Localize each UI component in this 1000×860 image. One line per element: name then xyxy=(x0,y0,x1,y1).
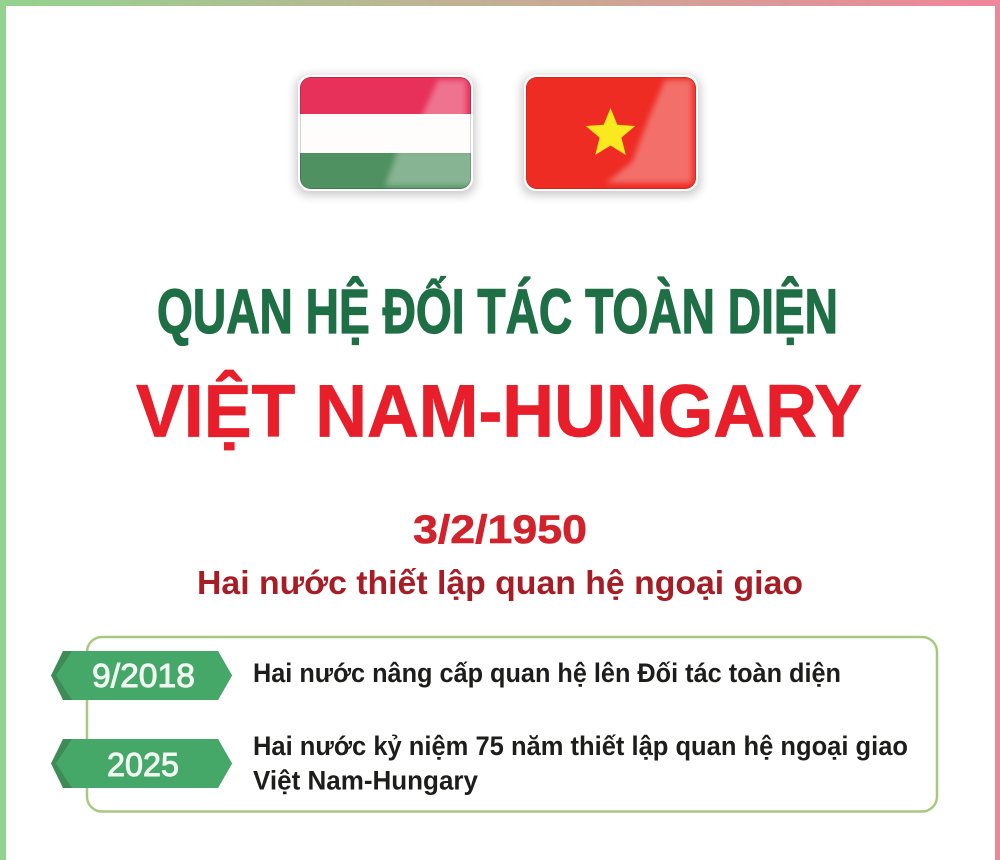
title: line two: VIỆT NAM-HUNGARY xyxy=(136,370,862,452)
icon: yellow star xyxy=(586,108,635,155)
subtitle: Hai nước thiết lập quan hệ ngoại giao xyxy=(197,564,803,601)
event text: 2025: Việt Nam-Hungary xyxy=(253,766,478,796)
icon: Hungary flag xyxy=(296,75,480,195)
panel: timeline xyxy=(51,637,937,812)
badge: 9/2018: 9/2018 xyxy=(92,657,195,694)
badge: 2025: 2025 xyxy=(107,746,179,783)
badge: 2025 xyxy=(51,739,232,788)
icon: Vietnam flag xyxy=(522,75,700,195)
panel outline xyxy=(87,637,937,812)
event text: 2018: Hai nước nâng cấp quan hệ lên Đối tác toàn diện xyxy=(253,658,841,688)
event text: 2025 xyxy=(253,731,908,796)
date heading: 3/2/1950 xyxy=(413,508,587,552)
event text: 2025: Hai nước kỷ niệm 75 năm thiết lập quan hệ ngoại giao xyxy=(253,731,908,761)
badge: 9/2018 xyxy=(51,651,232,700)
